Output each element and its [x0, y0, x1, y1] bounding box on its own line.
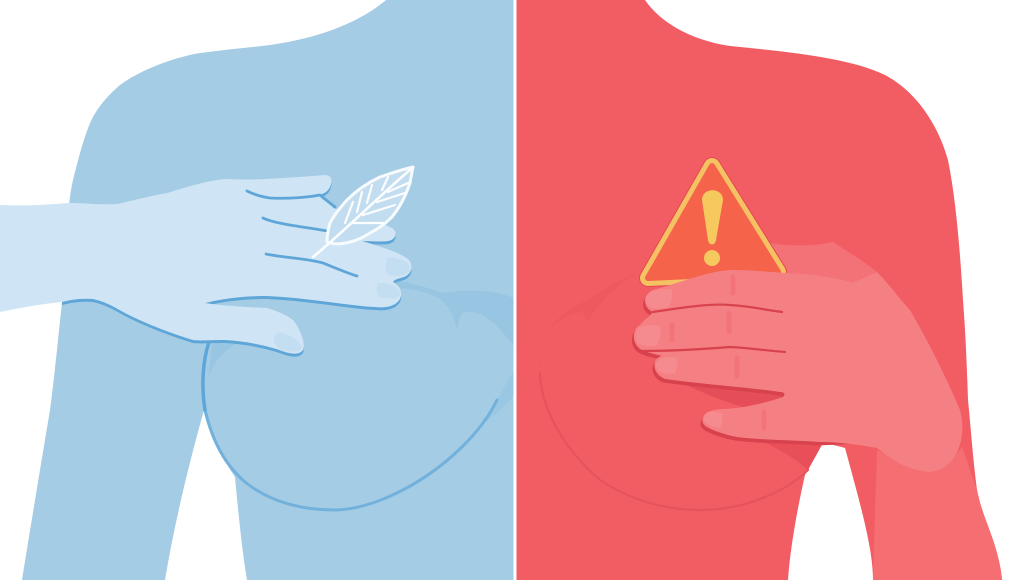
- icon: warning triangle: [648, 166, 778, 278]
- breast fold shadow: [395, 280, 514, 345]
- finger creases: [247, 191, 357, 276]
- fingernails: [636, 289, 722, 428]
- lower arm lighter tone: [873, 447, 1002, 580]
- light hand and forearm: [0, 175, 411, 354]
- hand shadow: [632, 274, 875, 446]
- panel: healthy blue side: [0, 0, 514, 580]
- red torso and arm: [516, 0, 1002, 580]
- blue torso and arm: [22, 0, 514, 580]
- back of hand: [770, 242, 877, 300]
- panel: warning red side: [516, 0, 1002, 580]
- thumb shadow: [760, 440, 823, 470]
- finger lines: [642, 305, 785, 352]
- right breast wedge: [481, 372, 514, 426]
- icon: white leaf: [313, 167, 413, 257]
- breast upper contour: [540, 272, 640, 373]
- fingernails: [274, 257, 410, 352]
- crotch shadow: [680, 382, 790, 408]
- light hand: [634, 270, 962, 472]
- knuckle marks: [672, 277, 764, 428]
- breast upper outline: [203, 342, 209, 410]
- hand shadow: [62, 182, 412, 357]
- breast side shade: [208, 342, 236, 378]
- breast outline: [540, 373, 808, 510]
- breast outline: [205, 400, 497, 510]
